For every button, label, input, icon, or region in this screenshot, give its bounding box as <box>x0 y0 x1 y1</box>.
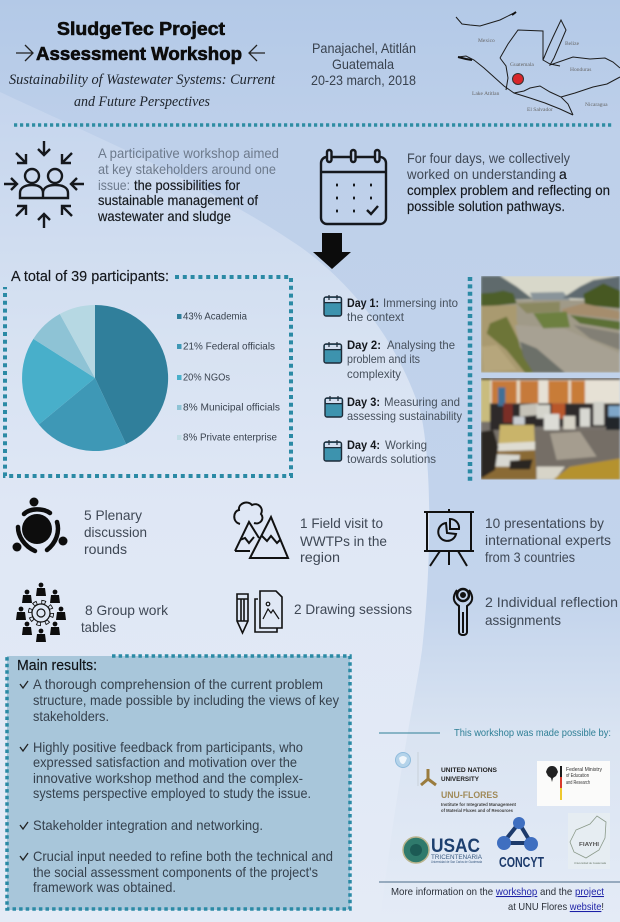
icon: people with converging arrows <box>4 141 84 228</box>
text: group work: 8 Group work <box>85 602 169 618</box>
location and date: Guatemala <box>332 56 394 72</box>
text: field visit: WWTPs in the <box>300 533 387 549</box>
subtitle: and Future Perspectives <box>74 94 210 110</box>
logo: UN University <box>396 752 517 813</box>
day 2 <box>324 338 455 381</box>
icon: calendar <box>321 150 386 224</box>
pie legend: 43% Academia <box>183 312 247 322</box>
pie legend: 8% Private enterprise <box>183 432 277 444</box>
icon: plenary discussion <box>12 498 68 552</box>
main results heading: Main results: <box>17 657 97 674</box>
day 1: Day 1: <box>347 296 379 310</box>
logo: UN University: of Material Fluxes and of Resources <box>441 808 514 813</box>
title: SludgeTec Project <box>57 19 225 39</box>
day 4: Working <box>385 438 427 452</box>
logo: UN University: UNITED NATIONS <box>441 767 498 774</box>
intro text: at key stakeholders around one <box>98 161 276 177</box>
day 2: Analysing the <box>387 338 455 352</box>
result 2: innovative workshop method and the complex- <box>33 770 303 786</box>
logo: Federal Ministry of Education and Research <box>537 761 610 806</box>
logo: FIAYHI: Universidad de Guatemala <box>574 861 606 865</box>
text: presentations <box>485 515 611 565</box>
photo: workshop room <box>481 378 620 480</box>
logo: USAC: TRICENTENARIA <box>431 854 483 861</box>
text: reflection: assignments <box>485 612 561 628</box>
result 4: Crucial input needed to refine both the technical and <box>33 848 333 864</box>
panel: main results <box>7 656 350 910</box>
day 3 <box>325 395 462 423</box>
panel: participants dotted frame <box>5 277 291 476</box>
icon: mountains and cloud <box>234 503 288 558</box>
more information links: More information on the workshop and the project <box>391 886 604 898</box>
logo: Federal Ministry of Education and Research: of Education <box>566 773 589 779</box>
result 3: Stakeholder integration and networking. <box>33 817 263 833</box>
subtitle: Sustainability of Wastewater Systems: Current <box>9 72 276 88</box>
result 2: Highly positive feedback from participants, who <box>33 739 303 755</box>
text: group work: tables <box>81 619 116 635</box>
text: plenary: rounds <box>84 541 127 557</box>
four days text: worked on understanding <box>406 166 556 182</box>
result 1: A thorough comprehension of the current problem <box>33 676 323 692</box>
result 1: structure, made possible by including the views of key <box>33 692 339 708</box>
four days text: For four days, we collectively <box>407 150 570 166</box>
day 2: complexity <box>347 367 401 381</box>
pie chart <box>22 305 168 451</box>
logo: FIAYHI <box>568 813 610 869</box>
day 3: Measuring and <box>384 395 460 409</box>
intro text: A participative workshop aimed <box>98 145 279 161</box>
map of Guatemala <box>456 12 620 115</box>
day 3: Day 3: <box>347 395 380 409</box>
map of Guatemala: Belize <box>565 41 580 47</box>
logo: UN University: UNU-FLORES <box>441 790 498 800</box>
intro text: wastewater and sludge <box>97 208 231 224</box>
logo: FIAYHI: FIAYHI <box>579 842 600 848</box>
participants heading: A total of 39 participants: <box>11 268 169 285</box>
day 1: the context <box>347 310 405 324</box>
pie legend: 20% NGOs <box>183 372 230 384</box>
result 1: stakeholders. <box>33 708 109 724</box>
result 4: the social assessment components of the project's <box>33 864 318 880</box>
day 1: Immersing into <box>383 296 458 310</box>
location and date: Panajachel, Atitlán <box>312 40 416 56</box>
four days text: possible solution pathways. <box>407 198 565 214</box>
logo: UN University: UNIVERSITY <box>441 776 480 783</box>
logo: USAC: Universidad de San Carlos de Guatemala <box>431 860 482 864</box>
text: reflection: 2 Individual reflection <box>485 594 618 610</box>
day 2: problem and its <box>347 352 420 366</box>
icon: group work gear <box>16 583 66 642</box>
text: reflection <box>485 594 618 628</box>
day 2: Day 2: <box>347 338 381 352</box>
day 4: Day 4: <box>347 438 380 452</box>
text: field visit: 1 Field visit to <box>300 515 383 531</box>
day 1 <box>324 295 458 324</box>
result 4 <box>20 848 333 895</box>
logo: USAC <box>403 836 483 864</box>
result 2: expressed satisfaction and motivation over the <box>33 754 297 770</box>
four days text: complex problem and reflecting on <box>407 182 610 198</box>
text: presentations: 10 presentations by <box>485 515 604 531</box>
map of Guatemala: Nicaragua <box>585 102 608 108</box>
intro text: issue: <box>98 177 130 193</box>
more information links: at UNU Flores website! <box>508 901 604 913</box>
four days text <box>406 150 610 214</box>
result 4: framework was obtained. <box>33 879 176 895</box>
day 4: towards solutions <box>347 452 436 466</box>
title <box>16 19 265 64</box>
text: group work <box>81 602 169 635</box>
map of Guatemala: Mexico <box>478 38 495 44</box>
result 1 <box>20 676 339 724</box>
result 2: systems perspective employed to study the issue. <box>33 785 311 801</box>
location and date: 20-23 march, 2018 <box>311 72 416 88</box>
day 3: assessing sustainability <box>347 409 462 423</box>
text: plenary <box>84 507 147 557</box>
pie legend <box>177 312 280 444</box>
logo: CONCYT <box>497 817 544 871</box>
result 2 <box>20 739 311 801</box>
four days text: a <box>559 166 567 182</box>
logo: Federal Ministry of Education and Research: and Research <box>566 780 590 786</box>
icon: individual reflection <box>454 589 472 635</box>
map of Guatemala: Guatemala <box>510 62 534 68</box>
title: Assessment Workshop <box>36 44 242 64</box>
icon: pencil and drawing sheets <box>237 591 282 633</box>
text: plenary: 5 Plenary <box>84 507 142 523</box>
logo: UN University: Institute for Integrated Management <box>441 802 517 807</box>
text: plenary: discussion <box>84 524 147 540</box>
logo: Federal Ministry of Education and Research: Federal Ministry <box>566 767 602 773</box>
text: field visit: region <box>300 549 340 565</box>
day 4 <box>324 438 436 466</box>
map of Guatemala: Lake Atitlan <box>472 91 500 97</box>
more information links <box>391 886 604 913</box>
pie legend: 21% Federal officials <box>183 342 275 352</box>
map of Guatemala: El Salvador <box>527 107 553 113</box>
intro text: the possibilities for <box>134 177 240 193</box>
intro text <box>97 145 279 224</box>
location and date <box>311 40 416 88</box>
arrow down <box>313 233 351 269</box>
text: drawing: 2 Drawing sessions <box>294 601 412 617</box>
text: field visit <box>300 515 387 565</box>
logo: USAC: USAC <box>431 836 480 857</box>
photo: river valley <box>481 276 620 373</box>
text: presentations: international experts <box>485 532 611 548</box>
subtitle <box>9 72 276 110</box>
icon: presentation board <box>424 509 474 566</box>
pie legend: 8% Municipal officials <box>183 402 280 414</box>
intro text: sustainable management of <box>98 192 258 208</box>
logo: CONCYT: CONCYT <box>499 854 544 871</box>
text: presentations: from 3 countries <box>485 549 575 565</box>
map of Guatemala: Honduras <box>570 67 591 73</box>
